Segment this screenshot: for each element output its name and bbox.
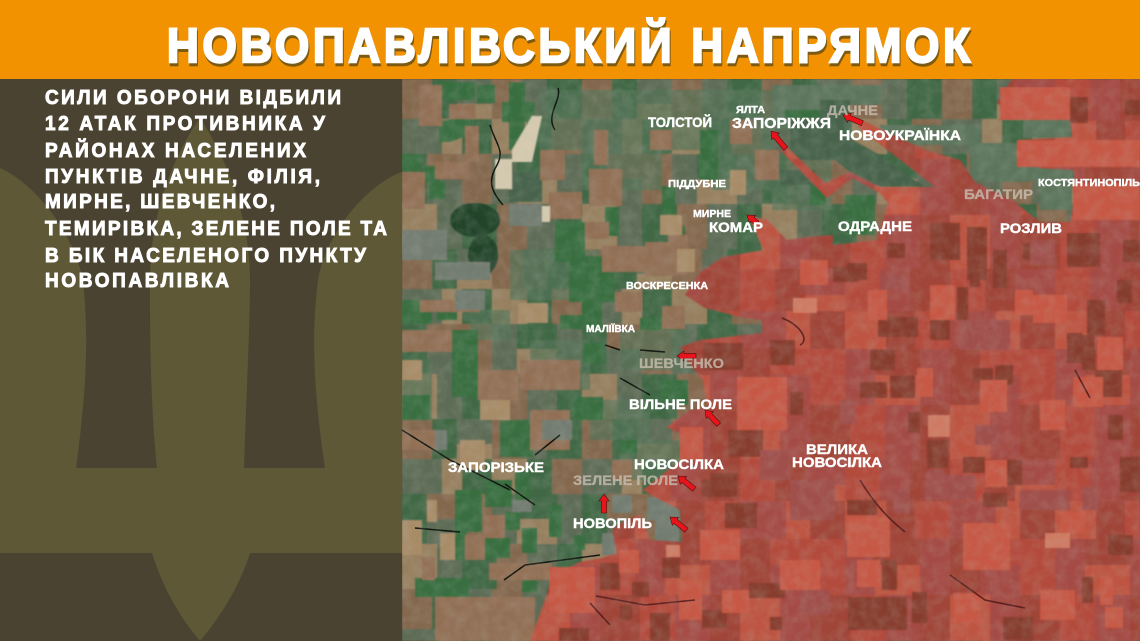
arrow: Новосілка bbox=[675, 472, 697, 493]
map: occupied territory overlay bbox=[530, 79, 1140, 641]
icon: trident emblem bbox=[0, 118, 402, 641]
map: place labels: ЯЛТА bbox=[736, 105, 765, 116]
map: place labels: МИРНЕ bbox=[693, 209, 731, 220]
map: fields under overlay bbox=[549, 87, 1140, 641]
header bar bbox=[0, 0, 1140, 79]
map: place labels: МАЛІЇВКА bbox=[586, 322, 635, 335]
map: texture bbox=[402, 79, 1140, 641]
arrow: Шевченко bbox=[677, 351, 696, 361]
map: place labels: ДАЧНЕ bbox=[827, 102, 878, 118]
map: place labels: ПІДДУБНЕ bbox=[668, 179, 726, 190]
arrow: Вільне Поле bbox=[701, 407, 722, 428]
map: place labels: ВІЛЬНЕ ПОЛЕ bbox=[629, 396, 732, 412]
map: place labels: КОМАР bbox=[709, 219, 763, 235]
panel: text sidebar with trident bbox=[0, 79, 402, 641]
text block: summary: 12 АТАК ПРОТИВНИКА У bbox=[45, 112, 326, 135]
arrow: Зелене Поле bbox=[599, 494, 609, 513]
map: place labels: ЗАПОРІЗЬКЕ bbox=[448, 459, 544, 475]
text block: summary: НОВОПАВЛІВКА bbox=[45, 269, 229, 292]
map: place labels bbox=[448, 102, 1140, 531]
arrow: Дачне bbox=[841, 110, 864, 128]
map: rivers in occupied zone bbox=[590, 318, 1090, 625]
arrow: south of Новосілка bbox=[667, 513, 689, 534]
panel: satellite map bbox=[402, 79, 1140, 641]
header bar: НОВОПАВЛІВСЬКИЙ НАПРЯМОК bbox=[168, 21, 972, 75]
map: place labels: ТОЛСТОЙ bbox=[648, 113, 712, 130]
map: place labels: НОВОСІЛКА bbox=[634, 456, 724, 472]
map: place labels: ОДРАДНЕ bbox=[838, 218, 912, 234]
map: place labels: ЗЕЛЕНЕ ПОЛЕ bbox=[573, 472, 678, 488]
map: place labels: ВЕЛИКА bbox=[806, 441, 868, 457]
text block: summary: РАЙОНАХ НАСЕЛЕНИХ bbox=[45, 137, 307, 162]
map: place labels: КОСТЯНТИНОПІЛЬ bbox=[1038, 178, 1140, 189]
text block: summary: В БІК НАСЕЛЕНОГО ПУНКТУ bbox=[45, 244, 367, 267]
map: place labels: НОВОУКРАЇНКА bbox=[839, 127, 961, 143]
map: place labels: РОЗЛИВ bbox=[1000, 220, 1062, 236]
arrow: Комар bbox=[744, 211, 760, 227]
text block: summary: ТЕМИРІВКА, ЗЕЛЕНЕ ПОЛЕ ТА bbox=[45, 217, 387, 240]
map: rivers bbox=[402, 88, 665, 580]
map: place labels: НОВОСІЛКА bbox=[792, 454, 882, 470]
map: place labels: ЗАПОРІЖЖЯ bbox=[732, 115, 831, 132]
text block: summary: МИРНЕ, ШЕВЧЕНКО, bbox=[45, 190, 275, 213]
arrow: Запоріжжя bbox=[767, 128, 790, 152]
map: place labels: ШЕВЧЕНКО bbox=[639, 355, 724, 371]
map: place labels: НОВОПІЛЬ bbox=[573, 515, 652, 531]
map: place labels: ВОСКРЕСЕНКА bbox=[626, 281, 708, 292]
map: place labels: БАГАТИР bbox=[964, 186, 1033, 202]
text block: summary: СИЛИ ОБОРОНИ ВІДБИЛИ bbox=[45, 86, 341, 109]
map: field patches bbox=[402, 82, 1073, 641]
title: НОВОПАВЛІВСЬКИЙ НАПРЯМОК bbox=[167, 18, 971, 72]
text block: summary bbox=[45, 86, 387, 292]
text block: summary: ПУНКТІВ ДАЧНЕ, ФІЛІЯ, bbox=[45, 165, 320, 188]
